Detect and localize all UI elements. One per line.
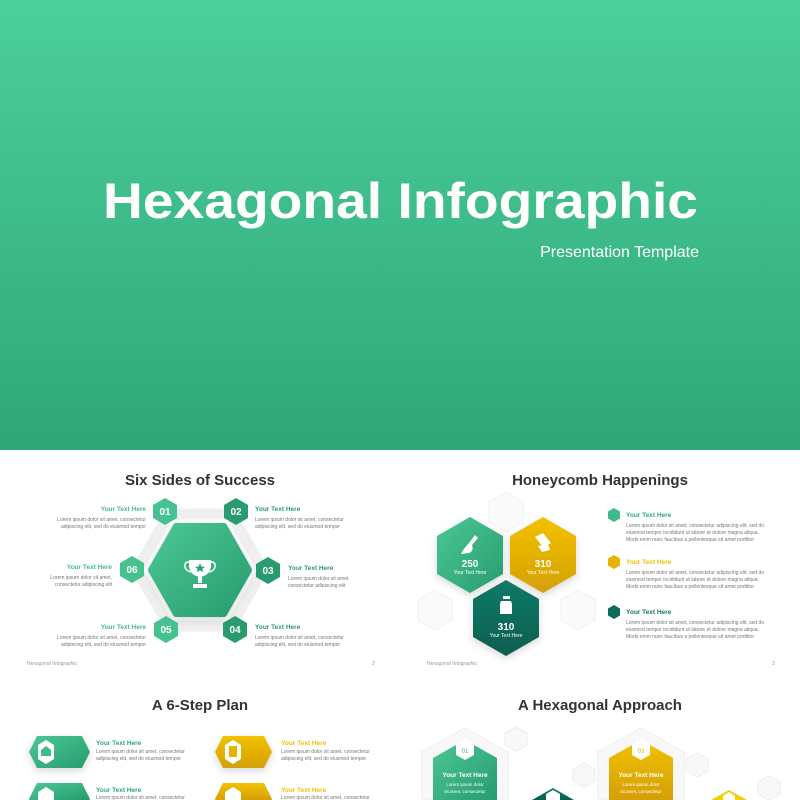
hex 03: sit amet, consectetur — [620, 789, 662, 794]
hex 01: Your Text Here — [442, 772, 488, 779]
footer: Hexagonal Infographic — [27, 661, 78, 667]
number hexes: 04 — [229, 625, 241, 636]
number hexes — [120, 498, 280, 643]
item texts: Your Text Here — [288, 565, 334, 572]
legend items: Morbi enim nunc faucibus a pellentesque sit amet porttitor — [626, 584, 754, 590]
panel: 6-step plan: Your Text Here — [96, 787, 142, 794]
footer: 3 — [772, 661, 775, 667]
legend items: eiusmod tempor incididunt ut labore et dolore magna aliqua. — [626, 627, 759, 633]
ghost hexes — [422, 727, 780, 800]
heading: A 6-Step Plan — [152, 697, 248, 714]
hex 01: 01 — [462, 749, 469, 755]
item texts: Lorem ipsum dolor sit amet, consectetur — [57, 635, 146, 641]
hex 03 — [609, 739, 673, 800]
item texts: consectetur adipiscing elit — [55, 582, 113, 588]
hex 250: 250 — [462, 559, 479, 570]
panel: 6-step plan: adipiscing elit, sed do eiusmod tempor — [281, 756, 366, 762]
panel: 6-step plan — [29, 697, 370, 800]
title: Hexagonal Infographic — [103, 173, 698, 229]
item texts: Lorem ipsum dolor sit amet, consectetur — [57, 517, 146, 523]
hex 310 yellow: Your Text Here — [527, 570, 560, 576]
panel: honeycomb happenings — [418, 472, 775, 667]
legend items — [608, 508, 764, 640]
hex 310 teal — [473, 580, 539, 656]
item texts: consectetur adipiscing elit — [288, 583, 346, 589]
item texts: Lorem ipsum dolor sit amet, — [50, 575, 112, 581]
number hexes: 02 — [230, 507, 242, 518]
hex 01: sit amet, consectetur — [444, 789, 486, 794]
number hexes: 05 — [160, 625, 172, 636]
hex 250: Your Text Here — [454, 570, 487, 576]
legend items: Morbi enim nunc faucibus a pellentesque sit amet porttitor — [626, 634, 754, 640]
hex 310 teal: Your Text Here — [490, 633, 523, 639]
item texts: adipiscing elit, sed do eiusmod tempor — [255, 524, 340, 530]
item texts: Your Text Here — [67, 564, 112, 571]
central hexagon with trophy — [151, 526, 249, 614]
ring — [137, 514, 263, 626]
number hexes: 01 — [159, 507, 171, 518]
item texts: Your Text Here — [101, 624, 146, 631]
panel: hexagonal approach — [422, 697, 780, 800]
panel: 6-step plan: Your Text Here — [96, 740, 142, 747]
panel: 6-step plan: Your Text Here — [281, 740, 327, 747]
hex 01: Lorem ipsum dolor — [446, 782, 484, 787]
panel: 6-step plan: adipiscing elit, sed do eiusmod tempor — [96, 756, 181, 762]
step 4 — [215, 783, 272, 800]
step 3 — [29, 783, 90, 800]
panel: 6-step plan: Lorem ipsum dolor sit amet, consectetur — [281, 749, 370, 755]
footer: 2 — [372, 661, 375, 667]
footer — [27, 661, 375, 667]
legend items: Lorem ipsum dolor sit amet, consectetur adipiscing elit, sed do — [626, 620, 764, 626]
heading: Honeycomb Happenings — [512, 472, 688, 489]
step 1 — [29, 736, 90, 768]
number hexes: 03 — [262, 566, 274, 577]
panel: six sides of success — [27, 472, 375, 667]
panel: 6-step plan: Your Text Here — [281, 787, 327, 794]
item texts: Lorem ipsum dolor sit amet, — [288, 576, 350, 582]
legend items: eiusmod tempor incididunt ut labore et dolore magna aliqua. — [626, 577, 759, 583]
legend items: Lorem ipsum dolor sit amet, consectetur adipiscing elit, sed do — [626, 570, 764, 576]
legend items: Your Text Here — [626, 512, 672, 519]
hex 310 yellow: 310 — [535, 559, 552, 570]
item texts: Lorem ipsum dolor sit amet, consectetur — [255, 635, 344, 641]
subtitle: Presentation Template — [540, 244, 699, 261]
hex 04 — [711, 790, 747, 800]
legend items: Your Text Here — [626, 559, 672, 566]
number hexes: 06 — [126, 565, 138, 576]
footer — [427, 661, 775, 667]
hero panel — [0, 0, 800, 450]
heading: A Hexagonal Approach — [518, 697, 682, 714]
item texts: Your Text Here — [255, 624, 301, 631]
hex 310 yellow — [510, 517, 576, 593]
item texts — [50, 506, 350, 648]
hex 310 teal: 310 — [498, 622, 515, 633]
heading: Six Sides of Success — [125, 472, 275, 489]
hex 03: Your Text Here — [618, 772, 664, 779]
footer: Hexagonal Infographic — [427, 661, 478, 667]
legend items: Your Text Here — [626, 609, 672, 616]
item texts: adipiscing elit, sed do eiusmod tempor — [61, 642, 146, 648]
legend items: Morbi enim nunc faucibus a pellentesque sit amet porttitor — [626, 537, 754, 543]
step 2 — [215, 736, 272, 768]
item texts: Your Text Here — [255, 506, 301, 513]
hex 01 — [433, 739, 497, 800]
hex 250 — [437, 517, 503, 593]
hex 03: Lorem ipsum dolor — [622, 782, 660, 787]
item texts: Your Text Here — [101, 506, 146, 513]
hex 02 — [532, 788, 574, 800]
legend items: Lorem ipsum dolor sit amet, consectetur adipiscing elit, sed do — [626, 523, 764, 529]
item texts: adipiscing elit, sed do eiusmod tempor — [61, 524, 146, 530]
item texts: adipiscing elit, sed do eiusmod tempor — [255, 642, 340, 648]
item texts: Lorem ipsum dolor sit amet, consectetur — [255, 517, 344, 523]
panel: 6-step plan: Lorem ipsum dolor sit amet, consectetur — [96, 749, 185, 755]
hex 03: 03 — [638, 749, 645, 755]
legend items: eiusmod tempor incididunt ut labore et dolore magna aliqua. — [626, 530, 759, 536]
ghost hexes — [418, 492, 595, 630]
